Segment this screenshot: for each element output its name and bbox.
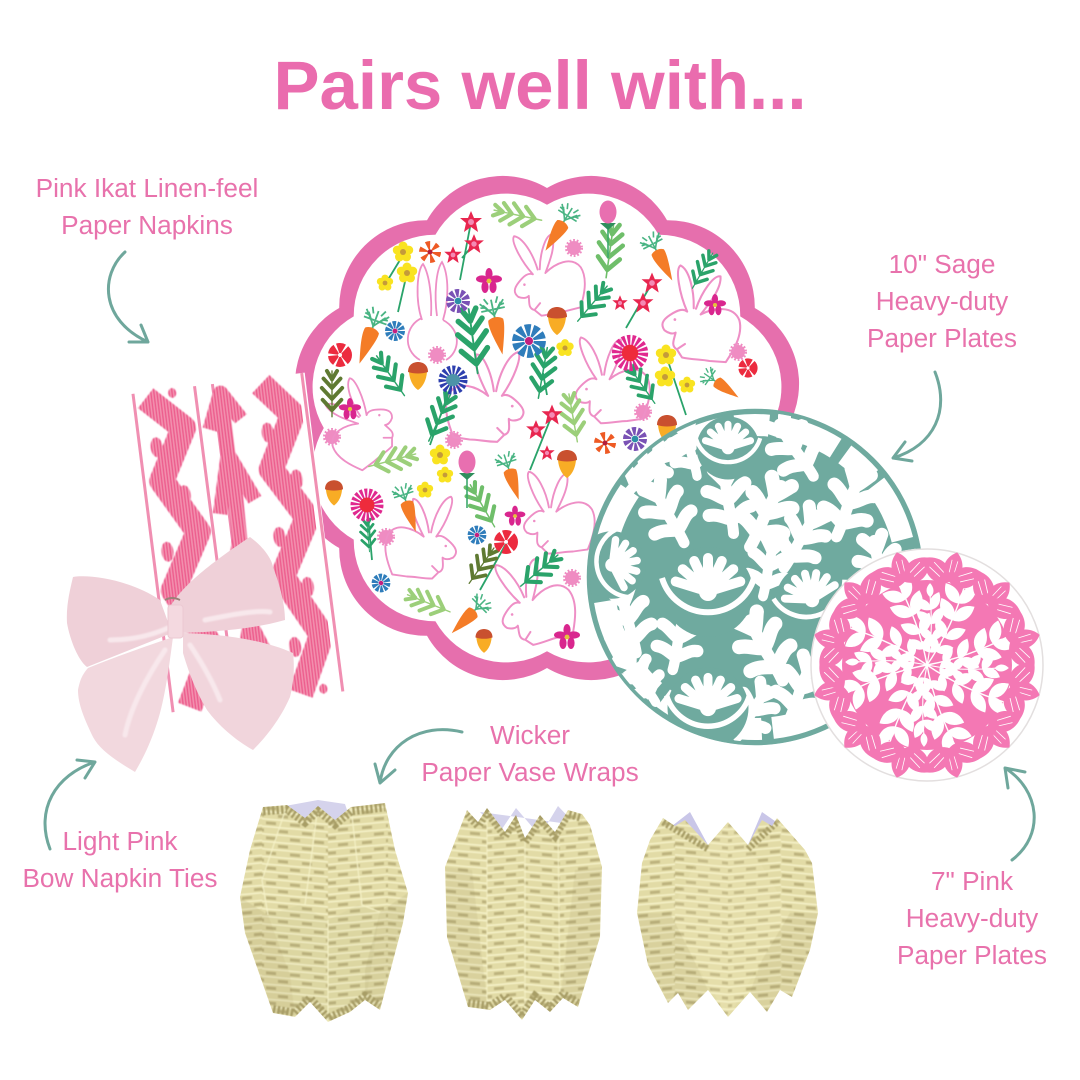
arrow: to vases [375, 730, 462, 783]
pink leaf plate [805, 543, 1049, 787]
label: pink plates: Heavy-duty [906, 903, 1039, 933]
arrow: to napkins [108, 252, 148, 342]
scalloped bunny plate [295, 176, 799, 680]
arrow: to sage plate [893, 372, 941, 461]
label: napkins: Paper Napkins [61, 210, 233, 240]
label: sage plates: 10" Sage [889, 249, 995, 279]
label: sage plates: Paper Plates [867, 323, 1017, 353]
flowers, carrots, acorns on plate [322, 200, 754, 653]
label: pink plates: 7" Pink [931, 866, 1014, 896]
pink velvet bow [67, 537, 294, 772]
wicker vase 3 [635, 805, 821, 1025]
arrow: to pink plate [1005, 768, 1034, 860]
sage coral plate [573, 409, 923, 748]
label: vase wraps: Wicker [490, 720, 570, 750]
ikat napkin [131, 372, 344, 713]
label: vase wraps: Paper Vase Wraps [421, 757, 639, 787]
label: pink plates: Paper Plates [897, 940, 1047, 970]
label: sage plates: Heavy-duty [876, 286, 1009, 316]
wicker vase 2 [443, 805, 604, 1025]
bunnies on plate [305, 229, 751, 650]
title: Pairs well with... [274, 47, 806, 124]
label: napkins: Pink Ikat Linen-feel [36, 173, 258, 203]
arrow: to bow [45, 760, 95, 849]
wicker vase 1 [238, 800, 410, 1025]
label: bow napkin ties: Bow Napkin Ties [22, 863, 218, 893]
label: bow napkin ties: Light Pink [62, 826, 178, 856]
